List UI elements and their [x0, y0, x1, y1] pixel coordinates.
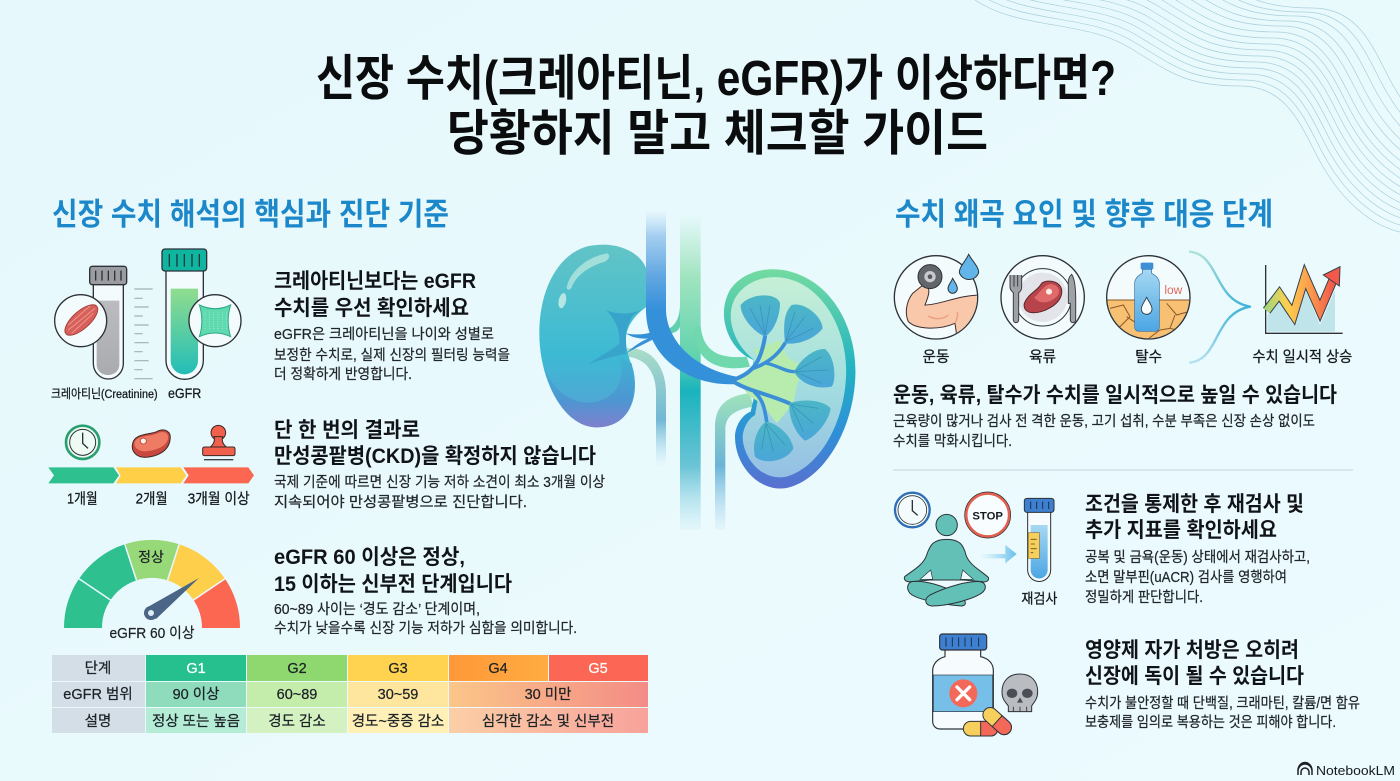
text block: eGFR thresholds: 수치가 낮을수록 신장 기능 저하가 심함을 의미합니다. [274, 620, 577, 637]
gauge labels: 정상 [138, 549, 164, 565]
table: CKD stages [52, 655, 648, 733]
table: CKD stages: 경도~중증 감소 [352, 713, 444, 730]
text block: eGFR first: 보정한 수치로, 실제 신장의 필터링 능력을 [274, 347, 510, 364]
title: 당황하지 말고 체크할 가이드 [447, 107, 988, 161]
text block: retest under controlled conditions: 공복 및 금욕(운동) 상태에서 재검사하고, [1085, 549, 1310, 566]
text block: supplements warning: 보충제를 임의로 복용하는 것은 피해야 합니다. [1085, 714, 1336, 731]
left kidney [539, 245, 655, 427]
text block: eGFR thresholds: 60~89 사이는 ‘경도 감소’ 단계이며, [274, 601, 480, 618]
title [316, 52, 1116, 161]
gauge: eGFR 60 or above [64, 540, 240, 642]
label: retest: 재검사 [1021, 590, 1057, 606]
table: CKD stages: G2 [287, 661, 307, 677]
text block: retest under controlled conditions: 정밀하게 판단합니다. [1085, 589, 1203, 606]
table: CKD stages: 30~59 [378, 687, 418, 703]
text block: CKD diagnosis: 단 한 번의 결과로 [274, 419, 420, 442]
icon labels: 수치 일시적 상승 [1252, 349, 1352, 366]
text block: CKD diagnosis: 지속되어야 만성콩팥병으로 진단합니다. [274, 494, 527, 511]
timeline labels: 2개월 [136, 491, 168, 508]
timeline labels [67, 491, 250, 508]
connector bracket [1190, 252, 1250, 363]
right kidney [724, 269, 855, 489]
table: CKD stages: eGFR 범위 [63, 686, 133, 703]
timeline labels: 3개월 이상 [188, 491, 250, 508]
icon labels: 탈수 [1135, 349, 1162, 366]
icon: clock [66, 426, 99, 459]
heading: right section: 수치 왜곡 요인 및 향후 대응 단계 [895, 197, 1273, 232]
text block: eGFR thresholds [274, 546, 577, 637]
text block: eGFR thresholds: 15 이하는 신부전 단계입니다 [274, 573, 512, 596]
icon labels [923, 349, 1352, 366]
text block: temporary rises: 운동, 육류, 탈수가 수치를 일시적으로 높일 수 있습니다 [893, 384, 1337, 407]
table: CKD stages: 30 미만 [525, 686, 571, 703]
icon: meditation and retest [895, 492, 1057, 606]
table: CKD stages: G4 [488, 661, 508, 677]
table: CKD stages: G5 [588, 661, 608, 677]
table: CKD stages: 심각한 감소 및 신부전 [482, 713, 614, 730]
icon labels: 육류 [1029, 350, 1056, 366]
text block: retest under controlled conditions [1085, 493, 1310, 606]
icon: meat plate [1001, 256, 1084, 339]
text block: eGFR first: 수치를 우선 확인하세요 [274, 297, 469, 320]
heading: left section: 신장 수치 해석의 핵심과 진단 기준 [52, 197, 449, 232]
text block: CKD diagnosis: 만성콩팥병(CKD)을 확정하지 않습니다 [274, 445, 596, 468]
text block: retest under controlled conditions: 추가 지표를 확인하세요 [1085, 519, 1277, 542]
text block: eGFR first: 더 정확하게 반영합니다. [274, 366, 412, 383]
icon: creatinine and eGFR test tubes [51, 249, 241, 401]
table: CKD stages: 설명 [85, 713, 111, 730]
label: eGFR: eGFR [168, 386, 201, 401]
text block: eGFR first: 크레아티닌보다는 eGFR [274, 270, 476, 293]
table: CKD stages: 단계 [85, 660, 111, 677]
text block: supplements warning: 신장에 독이 될 수 있습니다 [1085, 665, 1304, 688]
label: creatinine: 크레아티닌(Creatinine) [51, 387, 158, 401]
ureter and vessel [646, 210, 737, 384]
title: 신장 수치(크레아티닌, eGFR)가 이상하다면? [316, 52, 1116, 106]
icon: meat [132, 430, 170, 457]
icon: meditation and retest: STOP [972, 510, 1003, 522]
icon: stamp [203, 425, 235, 460]
timeline labels: 1개월 [67, 491, 98, 508]
text block: eGFR first [274, 270, 510, 383]
text block: CKD diagnosis [274, 419, 605, 511]
icon: dehydration bottle: low [1164, 283, 1183, 297]
icon labels: 운동 [923, 350, 949, 366]
table: CKD stages: 정상 또는 높음 [152, 713, 240, 730]
timeline arrows [48, 467, 254, 483]
text block: retest under controlled conditions: 소면 말부핀(uACR) 검사를 영행하여 [1085, 569, 1287, 586]
timeline: 1 to 3 months [48, 425, 254, 508]
text block: supplements warning: 영양제 자가 처방은 오히려 [1085, 639, 1299, 662]
icon: supplement bottle and skull [933, 634, 1038, 738]
chart: rising value [1266, 265, 1343, 333]
text block: retest under controlled conditions: 조건을 통제한 후 재검사 및 [1085, 493, 1304, 516]
logo: NotebookLM: NotebookLM [1316, 763, 1395, 778]
text block: CKD diagnosis: 국제 기준에 따르면 신장 기능 저하 소견이 최소 3개월 이상 [274, 474, 605, 491]
gauge needle [144, 578, 199, 620]
icon: dehydration bottle [1105, 256, 1192, 342]
table: CKD stages: 경도 감소 [268, 713, 326, 730]
table: CKD stages: G3 [388, 661, 408, 677]
text block: supplements warning: 수치가 불안정할 때 단백질, 크래마틴, 칼륨/면 함유 [1085, 695, 1360, 712]
gauge labels: eGFR 60 이상 [110, 625, 194, 642]
text block: supplements warning [1085, 639, 1360, 731]
text block: temporary rises [893, 384, 1337, 450]
table: CKD stages: 60~89 [277, 687, 317, 703]
text block: eGFR thresholds: eGFR 60 이상은 정상, [274, 546, 465, 569]
text block: eGFR first: eGFR은 크레아티닌을 나이와 성별로 [274, 326, 494, 343]
text block: temporary rises: 수치를 막화시킵니다. [893, 433, 1012, 450]
kidney illustration [539, 210, 855, 530]
icon: exercise [894, 254, 980, 340]
icons: exercise, meat, dehydration, rising value [894, 252, 1352, 366]
table: CKD stages: G1 [186, 661, 206, 677]
table: CKD stages: 90 이상 [173, 686, 219, 703]
text block: temporary rises: 근육량이 많거나 검사 전 격한 운동, 고기 섭취, 수분 부족은 신장 손상 없이도 [893, 413, 1315, 430]
gauge labels [110, 549, 194, 642]
